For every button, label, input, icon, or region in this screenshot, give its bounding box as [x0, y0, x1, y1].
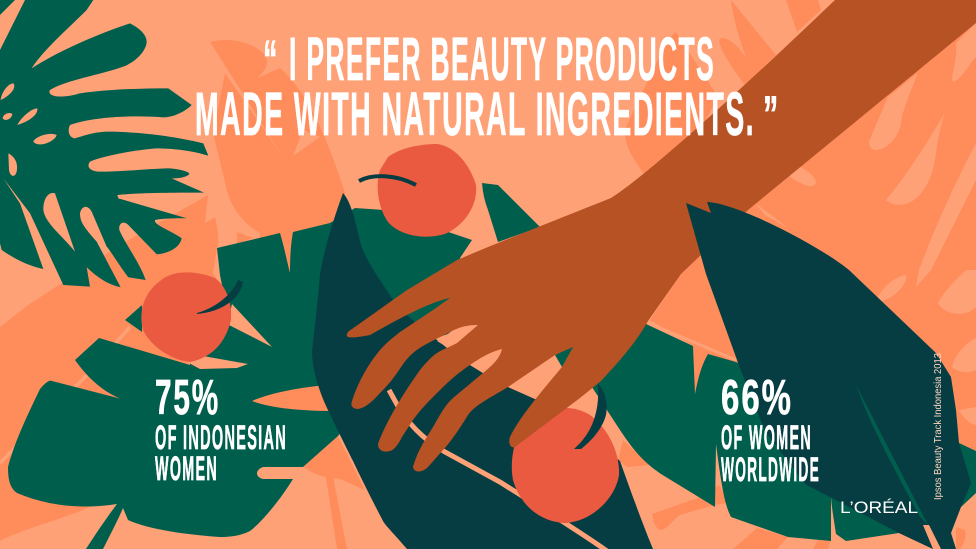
stat: 66% of women worldwide: 66% [721, 371, 793, 425]
text: OF WOMEN [721, 419, 812, 457]
bottom mid strips [303, 436, 966, 549]
light sliver right of apple [227, 304, 272, 347]
icon: apple bottom [512, 408, 619, 523]
mid slit in leaf [252, 386, 335, 411]
title [195, 25, 780, 148]
panel: central monstera leaf [8, 208, 472, 549]
light sliver under apple [187, 356, 248, 369]
gaps between fingers [437, 322, 575, 399]
stat: 75% of Indonesian women: WOMEN [155, 450, 218, 488]
panel: central dark leaf [312, 193, 653, 549]
small green leaf [482, 183, 540, 242]
background leaf: top right [625, 0, 821, 175]
background: right mid panel [650, 23, 976, 460]
arm and hand [347, 0, 976, 472]
background leaf: centre top [210, 40, 345, 280]
right-hand green leaf [590, 324, 976, 549]
icon: top-left monstera leaf [0, 0, 208, 287]
stat: 66% of women worldwide [721, 371, 820, 489]
stem: apple bottom [574, 384, 607, 449]
light wedge in centre leaf [293, 130, 320, 156]
light vein [923, 525, 941, 549]
source note: Ipsos Beauty Track Indonesia 2013 [932, 353, 944, 500]
light stem [396, 258, 428, 315]
icon: apple top [359, 144, 476, 237]
title: ” [763, 86, 780, 144]
right dark leaf [686, 202, 971, 549]
title: “ [263, 30, 279, 90]
text: WORLDWIDE [721, 451, 820, 489]
leaf vein [389, 390, 607, 549]
light leaf fingers: right [755, 23, 976, 425]
small green piece left of apple [125, 305, 142, 332]
leaf vein [856, 385, 928, 525]
icon: apple left [141, 272, 243, 362]
text: OF INDONESIAN [155, 419, 287, 457]
background leaf: lower left [0, 195, 272, 541]
stat: 75% of Indonesian women: 75% [155, 371, 220, 425]
background leaf vein [0, 327, 130, 463]
light strip above right leaf [646, 322, 736, 360]
stat: 75% of Indonesian women [155, 371, 287, 488]
logo: L'Oreal: L’ORÉAL [840, 498, 918, 517]
